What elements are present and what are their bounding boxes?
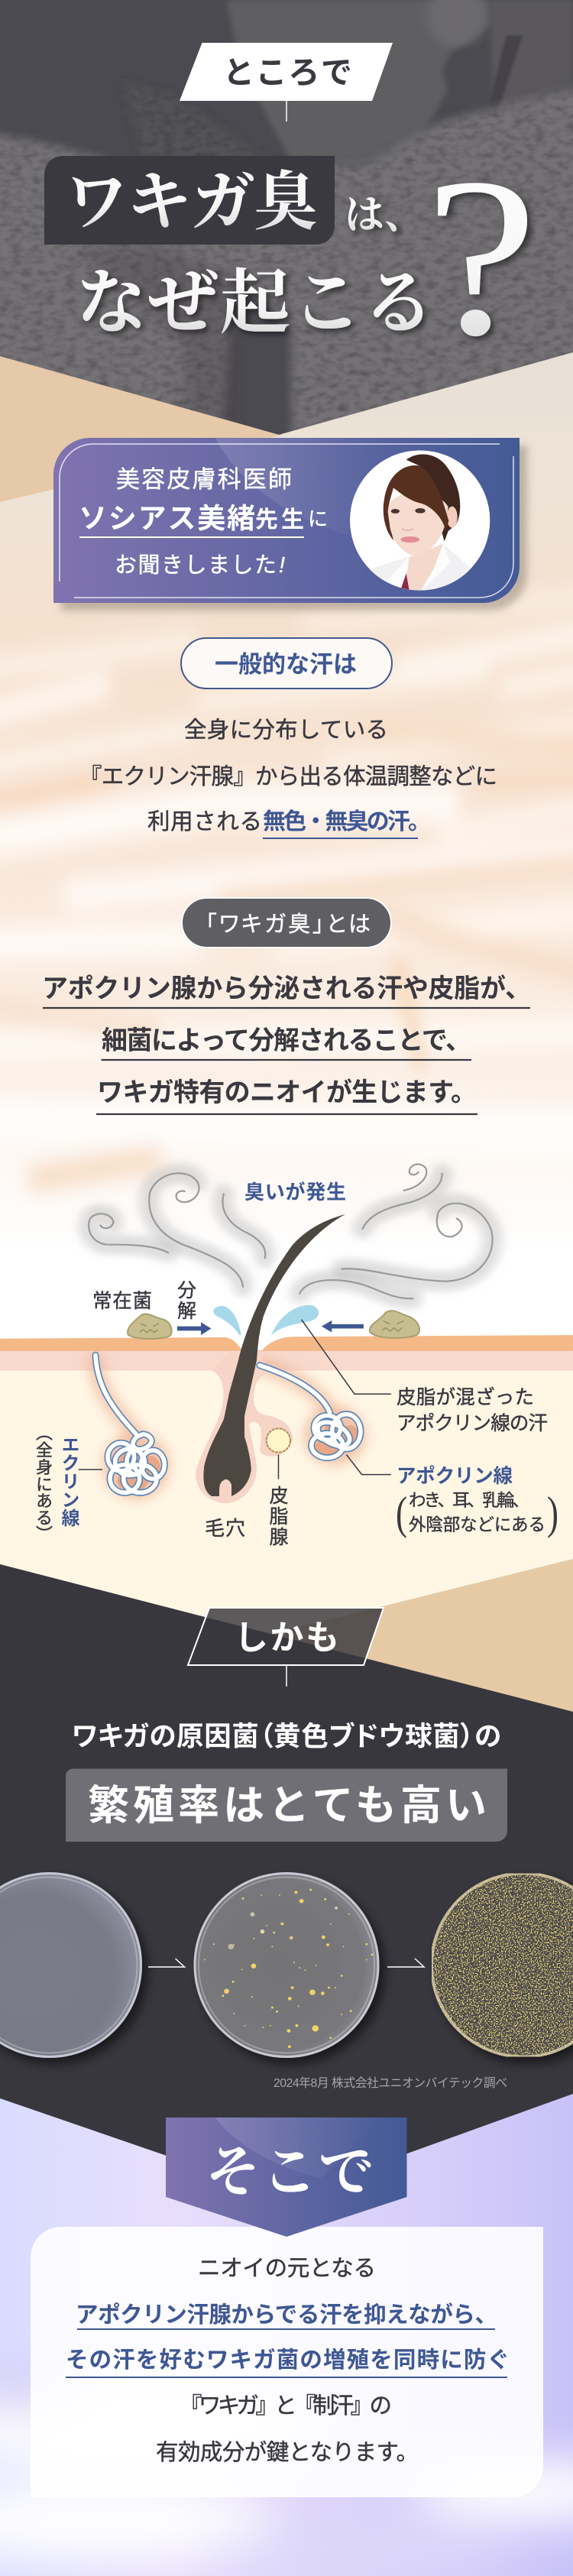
illustration: apocrine gland (260, 1366, 361, 1458)
text: eccrine sweat description: 無色・無臭の汗。 (263, 809, 431, 834)
pill: 一般的な汗は (181, 638, 392, 689)
illustration labels: 毛穴 (205, 1517, 245, 1540)
panel: doctor card: に (308, 507, 328, 530)
heading: growth rate: 繁殖率はとても高い (88, 1783, 487, 1829)
panel: conclusion card: アポクリン汗腺からでる汗を抑えながら、 (76, 2302, 497, 2328)
illustration labels: ( (396, 1489, 407, 1539)
panel: doctor card: 先生 (255, 507, 304, 533)
heading: ワキガ臭は、なぜ起こる？: なぜ起こる (76, 247, 434, 348)
illustration labels: 外陰部などにある (409, 1515, 545, 1534)
heading: ワキガ臭は、なぜ起こる？: 、 (384, 183, 424, 240)
panel: conclusion card (31, 2227, 543, 2497)
illustration labels: アポクリン線の汗 (397, 1413, 548, 1434)
shape: skin layers (0, 1335, 573, 1727)
text: eccrine sweat description (79, 718, 497, 838)
hero photo (0, 0, 573, 458)
banner: そこで (166, 2118, 406, 2237)
panel: doctor card: 美容皮膚科医師 (116, 466, 292, 493)
illustration labels: 解 (177, 1301, 196, 1322)
heading: ワキガ臭は、なぜ起こる？: ? (425, 131, 538, 383)
panel: conclusion card: 有効成分が鍵となります。 (156, 2440, 419, 2465)
background: lavender (0, 2086, 573, 2576)
arrow (387, 1959, 424, 1967)
illustration labels: 臭いが発生 (244, 1181, 346, 1204)
illustration labels: わき、耳、乳輪、 (409, 1491, 529, 1510)
heading: growth rate (66, 1721, 507, 1842)
heading: growth rate: ワキガの原因菌（黄色ブドウ球菌）の (72, 1721, 501, 1751)
text: eccrine sweat description: 利用される (147, 809, 262, 834)
dish: empty (0, 1874, 141, 2057)
panel: doctor card: ソシアス美緒 (79, 503, 255, 534)
label: ところで: ところで (223, 55, 352, 90)
illustration labels: ) (547, 1489, 558, 1539)
shape: tan triangle (0, 352, 283, 502)
illustration labels: 皮脂が混ざった (397, 1386, 534, 1408)
caption: source: 2024年8月 株式会社ユニオンバイテック調べ (274, 2076, 507, 2090)
illustration labels: 分 (177, 1280, 196, 1301)
heading: ワキガ臭は、なぜ起こる？: は (345, 183, 384, 240)
pill: ワキガ臭とは: 「ワキガ臭」とは (206, 912, 371, 937)
pill: ワキガ臭とは (182, 898, 391, 948)
petri dishes (0, 1874, 573, 2057)
illustration labels: 常在菌 (92, 1291, 152, 1312)
illustration labels: アポクリン線 (397, 1466, 513, 1487)
illustration labels: 腺 (269, 1527, 289, 1548)
dish: many colonies (432, 1874, 573, 2057)
illustration labels: エクリン線 (58, 1435, 79, 1527)
panel: dark section (0, 1564, 573, 2197)
illustration: sweat duct glow (96, 1360, 365, 1499)
text: apocrine definition: ワキガ特有のニオイが生じます。 (97, 1077, 477, 1107)
illustration labels: 皮 (269, 1486, 289, 1507)
icon: hair shaft (203, 1214, 345, 1496)
portrait: doctor (350, 450, 490, 596)
background: tan diagonal (260, 1559, 573, 1716)
text: eccrine sweat description: 全身に分布している (184, 718, 388, 743)
text: eccrine sweat description: 『エクリン汗腺』から出る体温調整などに (79, 764, 497, 789)
heading: ワキガ臭は、なぜ起こる？ (44, 131, 538, 383)
panel: conclusion card: 『ワキガ』と『制汗』の (180, 2393, 392, 2419)
illustration: bacteria, droplets and arrows (79, 1305, 419, 1479)
text: apocrine definition: 細菌によって分解されることで、 (102, 1026, 471, 1055)
panel: doctor card (53, 438, 520, 603)
arrow (148, 1959, 185, 1967)
text: apocrine definition (42, 974, 531, 1114)
illustration labels (34, 1181, 558, 1548)
background: satin cloth (0, 344, 573, 1353)
label: しかも (188, 1608, 384, 1687)
banner: そこで: そこで (206, 2127, 374, 2207)
panel: conclusion card: その汗を好むワキガ菌の増殖を同時に防ぐ (66, 2348, 510, 2373)
illustration labels: 脂 (269, 1506, 289, 1528)
panel: doctor card: お聞きしました (115, 553, 277, 578)
panel: doctor card: ! (279, 553, 285, 578)
illustration: eccrine gland (96, 1355, 164, 1492)
heading: ワキガ臭は、なぜ起こる？: ワキガ臭 (64, 151, 318, 243)
pill: 一般的な汗は: 一般的な汗は (215, 651, 357, 678)
dish: some colonies (195, 1874, 378, 2057)
label: しかも: しかも (235, 1619, 339, 1657)
illustration: smell swirls (89, 1165, 493, 1298)
illustration labels: （全身にある） (34, 1432, 53, 1534)
text: apocrine definition: アポクリン腺から分泌される汗や皮脂が、 (42, 974, 531, 1003)
label: ところで (180, 43, 393, 122)
panel: conclusion card: ニオイの元となる (198, 2256, 376, 2281)
illustration: hair follicle and sebaceous gland (196, 1214, 345, 1503)
